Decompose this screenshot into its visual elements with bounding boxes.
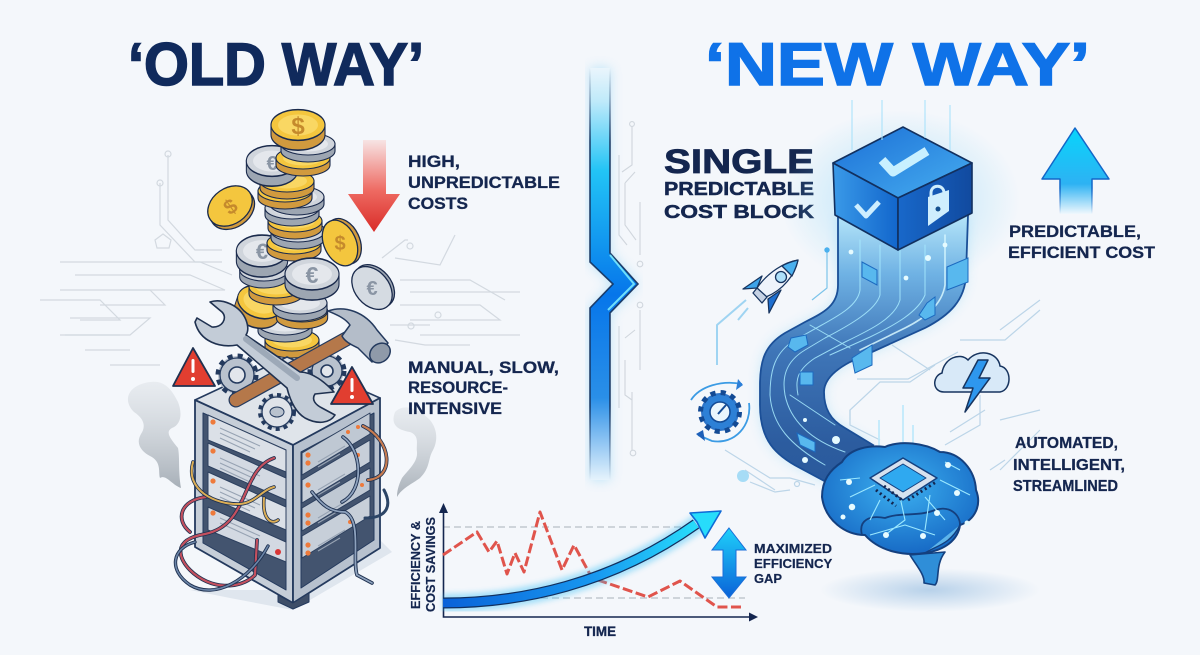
data ribbon bbox=[760, 215, 968, 484]
text: predictable efficient cost: EFFICIENT COST bbox=[1008, 243, 1156, 262]
check: top bbox=[882, 151, 927, 172]
coin stack bbox=[200, 110, 403, 358]
text: high unpredictable costs: HIGH, bbox=[408, 152, 460, 171]
red down arrow bbox=[348, 140, 400, 232]
ribbon nodes bbox=[802, 243, 947, 463]
server units left bbox=[208, 415, 286, 472]
text: single predictable cost block: PREDICTABLE bbox=[664, 179, 814, 199]
y axis label: COST SAVINGS bbox=[424, 517, 438, 612]
loose coin: gold right bbox=[315, 213, 368, 272]
text: manual slow resource-intensive: MANUAL, SLOW, bbox=[408, 358, 559, 377]
text: high unpredictable costs: COSTS bbox=[408, 194, 468, 213]
smoke right bbox=[393, 407, 436, 497]
text: single predictable cost block: COST BLOCK bbox=[664, 202, 814, 222]
glow beams above brain bbox=[879, 405, 913, 462]
hammer bbox=[236, 309, 394, 400]
title: new way: ‘NEW WAY’ bbox=[705, 31, 1090, 98]
rack top bbox=[195, 357, 380, 445]
glow halo behind cube bbox=[780, 110, 1020, 290]
automation gear icon bbox=[691, 379, 749, 442]
text: automated intelligent streamlined: AUTOMATED, bbox=[1015, 435, 1118, 452]
text: automated intelligent streamlined: STREAMLINED bbox=[1013, 478, 1118, 495]
server units right bbox=[302, 413, 370, 475]
x axis label: TIME bbox=[584, 624, 616, 639]
gears bbox=[218, 354, 344, 429]
chart: efficiency and cost savings over time bbox=[409, 503, 758, 639]
brain shadow bbox=[820, 568, 1040, 612]
euro coin: upper: € bbox=[266, 153, 278, 175]
predictable cost cube bbox=[833, 127, 972, 250]
warning triangle left bbox=[173, 348, 215, 386]
rocket icon bbox=[717, 247, 830, 365]
text: single predictable cost block: SINGLE bbox=[664, 143, 814, 181]
rack left face bbox=[195, 400, 293, 603]
loose coin: silver right bbox=[344, 257, 403, 317]
loose coin: gold right: $ bbox=[334, 233, 346, 255]
title: old way: ‘OLD WAY’ bbox=[128, 31, 424, 98]
AI brain with chip bbox=[822, 443, 978, 585]
text: maximized efficiency gap: GAP bbox=[754, 572, 782, 586]
check: front bbox=[856, 202, 879, 216]
gear: lower bbox=[260, 395, 294, 429]
gear: left bbox=[218, 356, 256, 394]
text: high unpredictable costs: UNPREDICTABLE bbox=[408, 173, 560, 192]
rack right face bbox=[293, 398, 380, 603]
cloud with lightning icon bbox=[935, 353, 1009, 412]
axes bbox=[444, 510, 752, 617]
text: maximized efficiency gap: EFFICIENCY bbox=[754, 557, 833, 571]
chip bbox=[870, 458, 937, 500]
y axis label: EFFICIENCY & bbox=[409, 521, 423, 609]
padlock icon bbox=[928, 186, 949, 226]
circuit pattern: new way bbox=[725, 300, 1040, 492]
inner frames bbox=[203, 413, 286, 590]
coin: bottom gold bbox=[265, 329, 319, 358]
ribbon streamlines bbox=[770, 235, 945, 465]
text: maximized efficiency gap: MAXIMIZED bbox=[754, 542, 832, 556]
cables bbox=[175, 426, 388, 590]
wrench bbox=[195, 301, 335, 422]
gap arrow bbox=[712, 528, 746, 598]
gear: right bbox=[310, 354, 344, 388]
rack shadow bbox=[190, 540, 392, 610]
ribbon tiles bbox=[788, 258, 968, 452]
text: automated intelligent streamlined: INTELLIGENT, bbox=[1013, 457, 1125, 474]
server rack bbox=[175, 357, 392, 610]
text: manual slow resource-intensive: RESOURCE- bbox=[408, 378, 508, 397]
loose coin: silver right: € bbox=[366, 278, 378, 300]
warning triangle right bbox=[331, 367, 373, 404]
rack feet bbox=[278, 593, 309, 609]
circuit pattern: old way right bbox=[382, 235, 520, 345]
smoke left bbox=[128, 382, 181, 488]
brain circuits bbox=[840, 462, 970, 535]
loose coin: gold left bbox=[200, 177, 262, 238]
circuit pattern: divider right bbox=[619, 122, 643, 456]
red dashed line: old cost bbox=[443, 512, 742, 607]
blue growth arrow bbox=[443, 511, 721, 603]
status lights bbox=[210, 419, 364, 556]
euro coin: large left: € bbox=[256, 239, 268, 264]
loose coin: gold left: $ bbox=[219, 194, 242, 220]
center divider bbox=[590, 68, 638, 480]
euro coin: front: € bbox=[306, 262, 319, 288]
gridlines bbox=[443, 527, 745, 598]
vent lines bbox=[220, 428, 345, 551]
blue up arrow bbox=[1042, 128, 1109, 214]
dollar coin: top: $ bbox=[291, 113, 305, 140]
brain nodes bbox=[840, 462, 970, 539]
glow beams above cube bbox=[852, 100, 950, 150]
text: manual slow resource-intensive: INTENSIVE bbox=[408, 399, 502, 418]
text: predictable efficient cost: PREDICTABLE, bbox=[1009, 222, 1141, 241]
circuit pattern: old way left bbox=[40, 151, 232, 365]
